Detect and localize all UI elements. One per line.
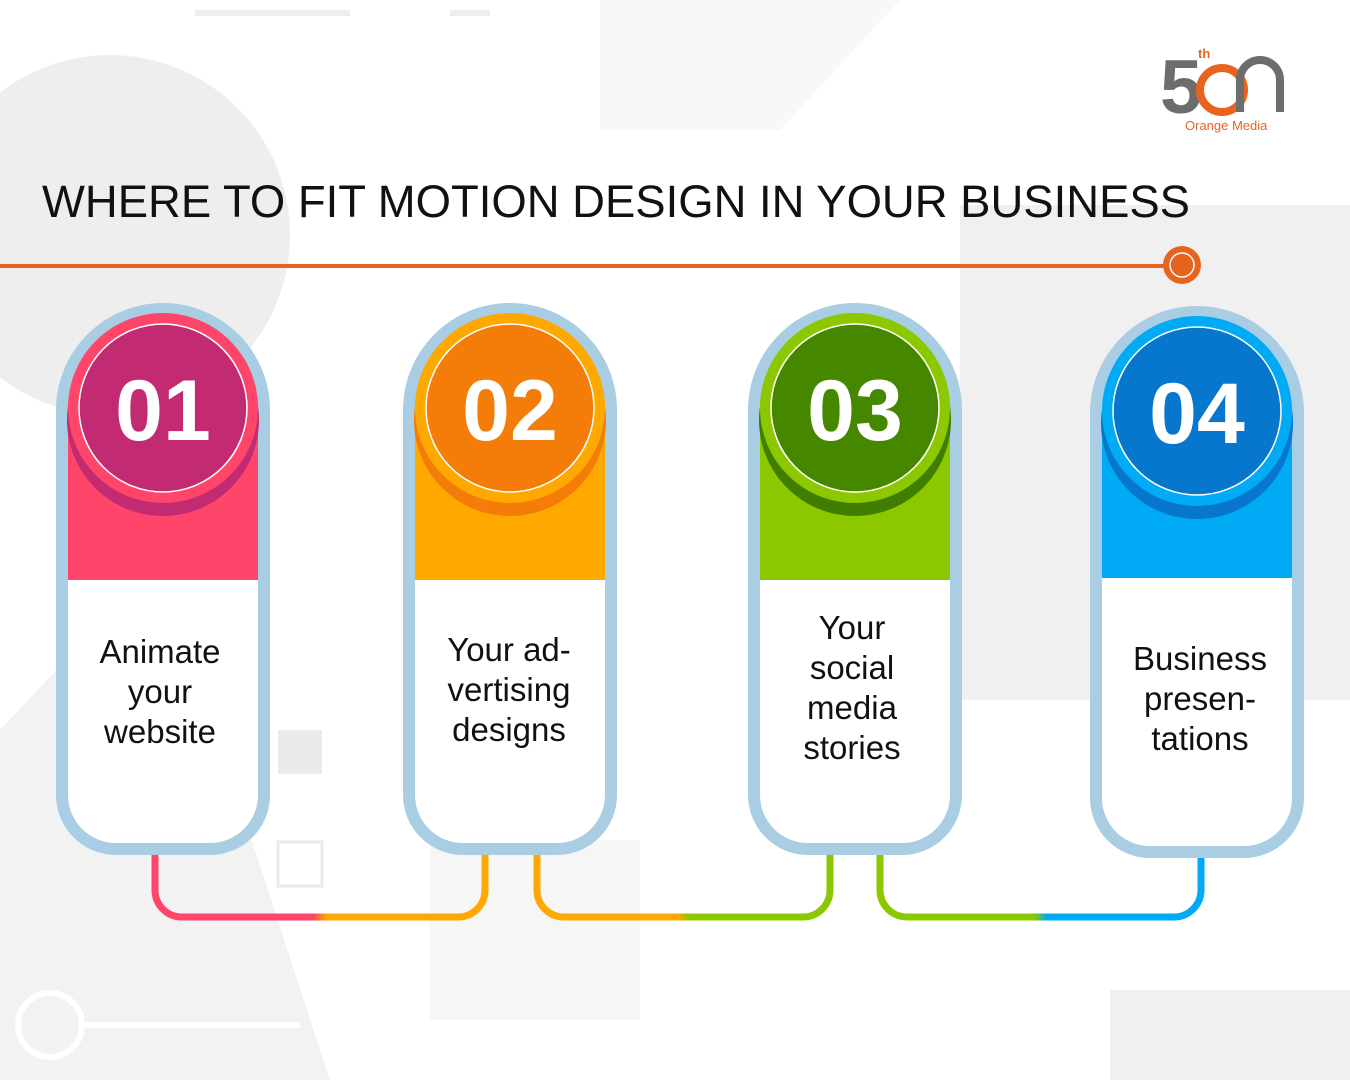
logo: 5 (1160, 45, 1202, 130)
orange timeline line (0, 246, 1201, 284)
logo: Orange Media (1185, 118, 1268, 133)
card 1: your (128, 673, 192, 710)
title: WHERE TO FIT MOTION DESIGN IN YOUR BUSINESS (42, 176, 1190, 227)
card 4: 04 (1149, 366, 1245, 462)
card 4: tations (1151, 720, 1249, 757)
card 3: stories (803, 729, 901, 766)
logo (1160, 45, 1280, 133)
card 2: vertising (448, 671, 570, 708)
card 4: presen- (1144, 680, 1256, 717)
card 1: website (103, 713, 216, 750)
card 1 (56, 303, 270, 855)
card 3: Your (819, 609, 885, 646)
card 3: media (807, 689, 898, 726)
card 4: Business (1133, 640, 1267, 677)
card 2: Your ad- (447, 631, 571, 668)
connectors (155, 845, 1201, 917)
card 3 (748, 303, 962, 855)
card 2 (403, 303, 617, 855)
logo: th (1198, 46, 1210, 61)
card 4 (1090, 306, 1304, 858)
card 3: social (810, 649, 894, 686)
card 2: 02 (462, 363, 558, 459)
card 3: 03 (807, 363, 903, 459)
card 1: 01 (115, 363, 211, 459)
card 2: designs (452, 711, 566, 748)
card 1: Animate (99, 633, 221, 670)
